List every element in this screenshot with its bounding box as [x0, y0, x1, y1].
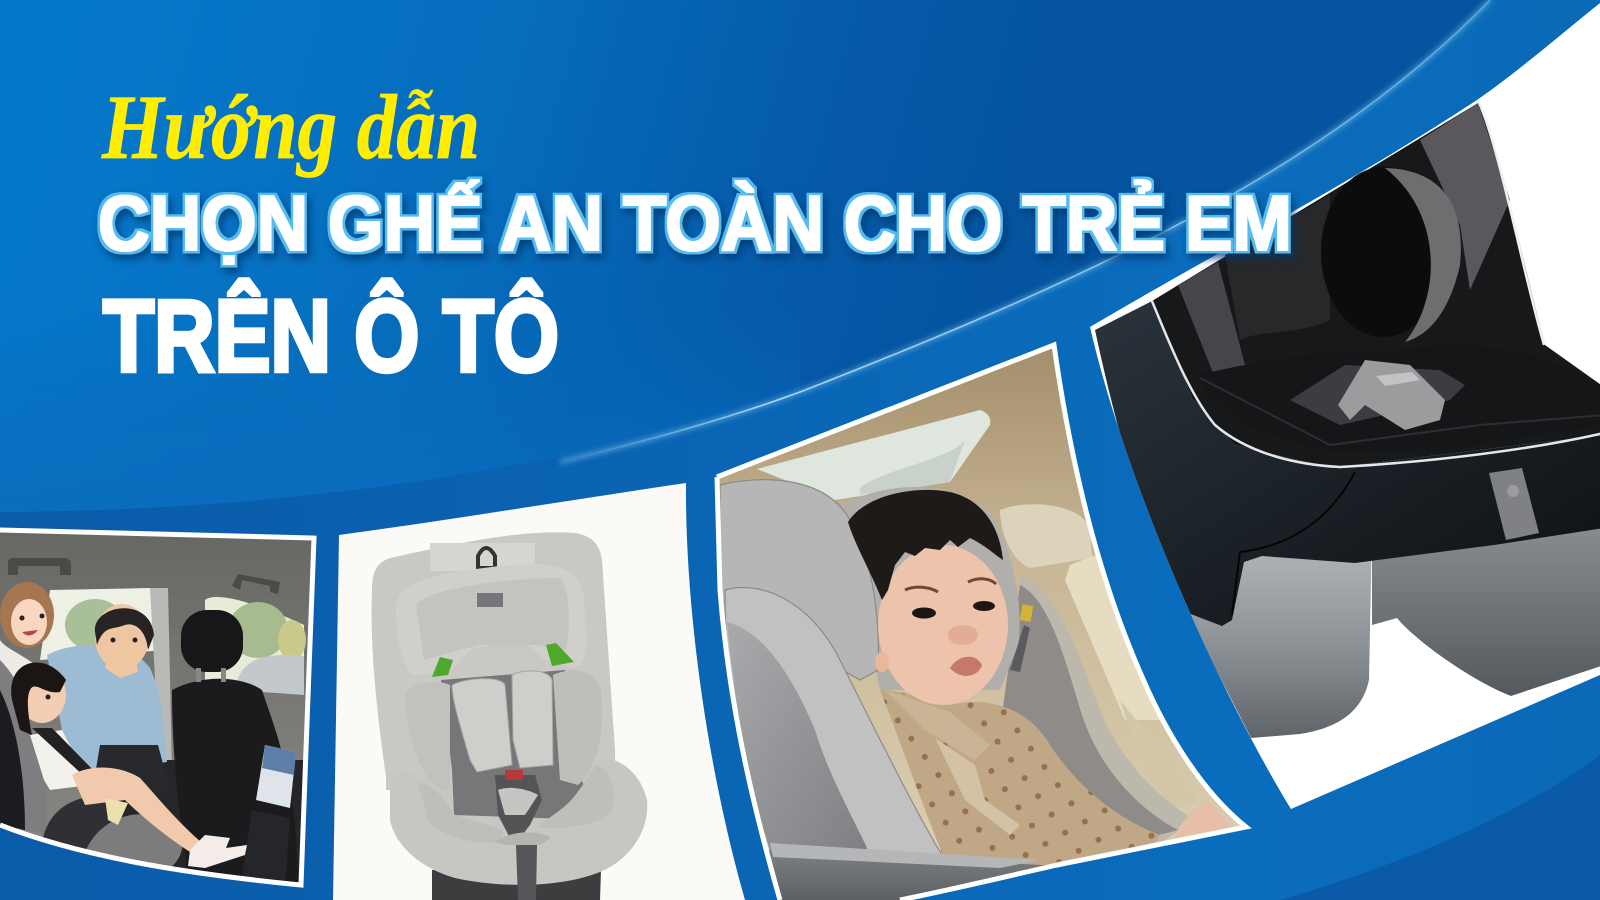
- mesh back panel: [1225, 195, 1330, 340]
- seat back: [1152, 103, 1600, 468]
- panel: family installing child seat in car: [0, 525, 320, 895]
- harness straps: [1290, 365, 1465, 425]
- top loop: [478, 548, 495, 568]
- seat base right leg: [1372, 515, 1600, 696]
- dashboard screen: [256, 745, 296, 808]
- grey upper strip: [1420, 103, 1510, 290]
- hand: [1170, 800, 1232, 845]
- head cushion: [1321, 167, 1445, 337]
- right interior: [1065, 555, 1170, 720]
- panel 3 white border: [717, 345, 1246, 900]
- door pillar: [150, 588, 172, 770]
- headrest: [476, 566, 497, 570]
- panel: toddler in grey car seat: [700, 340, 1260, 900]
- child: [30, 730, 79, 790]
- grey tab: [1489, 468, 1539, 540]
- left car window: [40, 588, 165, 660]
- seat cushion: [1198, 346, 1600, 452]
- lower black shell: [1095, 301, 1600, 626]
- foreground door sill: [768, 850, 1060, 900]
- face: [878, 545, 1008, 705]
- child seat back: [0, 660, 36, 734]
- parked car through window: [235, 655, 304, 695]
- curved dark blue header swoosh: [0, 0, 1490, 512]
- seat base left leg: [1186, 530, 1372, 738]
- green harness tabs: [432, 657, 453, 677]
- centre strap: [516, 845, 537, 900]
- seat base wings: [390, 759, 647, 885]
- sandals: [188, 835, 247, 868]
- rear seat: [172, 679, 298, 890]
- shell stitching: [1232, 472, 1355, 615]
- thigh cushions: [454, 814, 455, 815]
- nose: [948, 625, 978, 645]
- seat right wing: [1018, 575, 1188, 843]
- lower grey wing: [724, 586, 942, 854]
- eyes: [912, 608, 936, 618]
- buckle: [495, 775, 542, 838]
- title: Hướng dẫn: Hướng dẫn: [101, 76, 480, 178]
- panel 1 white border: [0, 530, 314, 885]
- headrest surround: [833, 487, 1020, 690]
- shoulder pads: [452, 679, 512, 772]
- grey outer wing: [720, 480, 878, 680]
- buckle: [1338, 360, 1445, 430]
- rear car window: [757, 410, 990, 500]
- title: CHỌN GHẾ AN TOÀN CHO TRẺ EM: CHỌN GHẾ AN TOÀN CHO TRẺ EM: [98, 179, 1292, 267]
- rear headrest: [1000, 504, 1092, 568]
- side cushions: [441, 682, 450, 753]
- mouth: [950, 657, 982, 676]
- eyebrows: [905, 587, 938, 592]
- seat base shadow: [432, 870, 601, 900]
- centre lip: [496, 832, 551, 845]
- panel: black convertible car seat on white: [1090, 3, 1600, 809]
- right car window: [205, 597, 304, 680]
- roof handles: [8, 558, 71, 575]
- shirt: [880, 690, 1160, 866]
- man: [47, 645, 167, 775]
- yellow headrest tag: [1020, 604, 1033, 622]
- booster seat: [41, 797, 122, 850]
- dark seat centre: [441, 670, 597, 820]
- seat shell: [372, 532, 615, 790]
- white piping: [1152, 301, 1600, 467]
- woman: [0, 640, 32, 678]
- floor and footwell: [118, 760, 304, 882]
- headrest label: [477, 593, 503, 607]
- title: TRÊN Ô TÔ: TRÊN Ô TÔ: [103, 279, 559, 393]
- hair: [848, 490, 1003, 600]
- panel: light grey child seat on white: [333, 483, 745, 900]
